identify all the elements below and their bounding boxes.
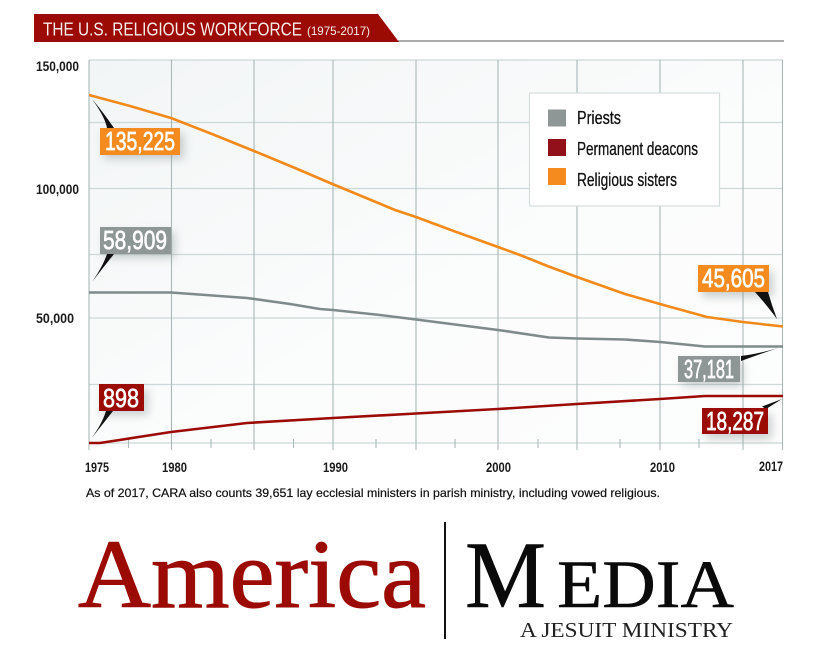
callout: 18,287: 18,287 [706, 406, 764, 436]
logo: America Media [78, 521, 734, 642]
callout: 58,909 [92, 225, 175, 282]
callout: 45,605: 45,605 [702, 263, 765, 293]
line: permanent deacons [89, 396, 783, 443]
x axis labels: 1975 [85, 459, 109, 475]
y axis labels: 100,000 [36, 181, 79, 197]
divider [444, 522, 446, 639]
line chart [36, 58, 783, 475]
title banner: THE U.S. RELIGIOUS WORKFORCE [43, 20, 302, 40]
plot background and grid [89, 60, 783, 450]
legend [530, 93, 720, 206]
x axis labels: 2010 [650, 459, 675, 475]
callout: 898 [91, 383, 148, 439]
callout: 135,225 [92, 99, 184, 159]
x axis labels [85, 458, 783, 475]
callout: 135,225: 135,225 [105, 126, 175, 156]
x axis labels: 2017 [759, 458, 783, 474]
legend item: priests: Priests [577, 108, 621, 128]
footnote: As of 2017, CARA also counts 39,651 lay ecclesial ministers in parish ministry, including vowed religious. [86, 486, 660, 500]
x axis labels: 2000 [486, 459, 511, 475]
title banner [34, 14, 784, 42]
legend item: religious sisters: Religious sisters [577, 170, 677, 190]
legend item: religious sisters [548, 168, 677, 190]
callout: 37,181: 37,181 [684, 354, 734, 384]
callout: 898: 898 [103, 383, 139, 413]
y axis labels: 150,000 [36, 58, 79, 74]
callout: 18,287 [702, 399, 782, 439]
legend item: permanent deacons: Permanent deacons [577, 139, 698, 159]
callout: 45,605 [698, 263, 777, 319]
wordmark: Media: EDIA [557, 546, 734, 622]
wordmark: America: America [78, 521, 426, 628]
tagline: A JESUIT MINISTRY [520, 618, 733, 642]
x axis labels: 1990 [323, 459, 348, 475]
wordmark: Media [465, 522, 734, 628]
line: priests [89, 292, 783, 346]
wordmark: Media: M [465, 522, 546, 628]
y axis labels [36, 58, 79, 326]
legend item: permanent deacons [548, 139, 698, 159]
callout: 58,909: 58,909 [103, 225, 167, 255]
title banner: (1975-2017) [307, 24, 370, 38]
callout: 37,181 [678, 348, 778, 386]
line: religious sisters [89, 95, 783, 326]
x axis labels: 1980 [162, 459, 187, 475]
y axis labels: 50,000 [36, 310, 74, 326]
legend item: priests [548, 108, 621, 128]
